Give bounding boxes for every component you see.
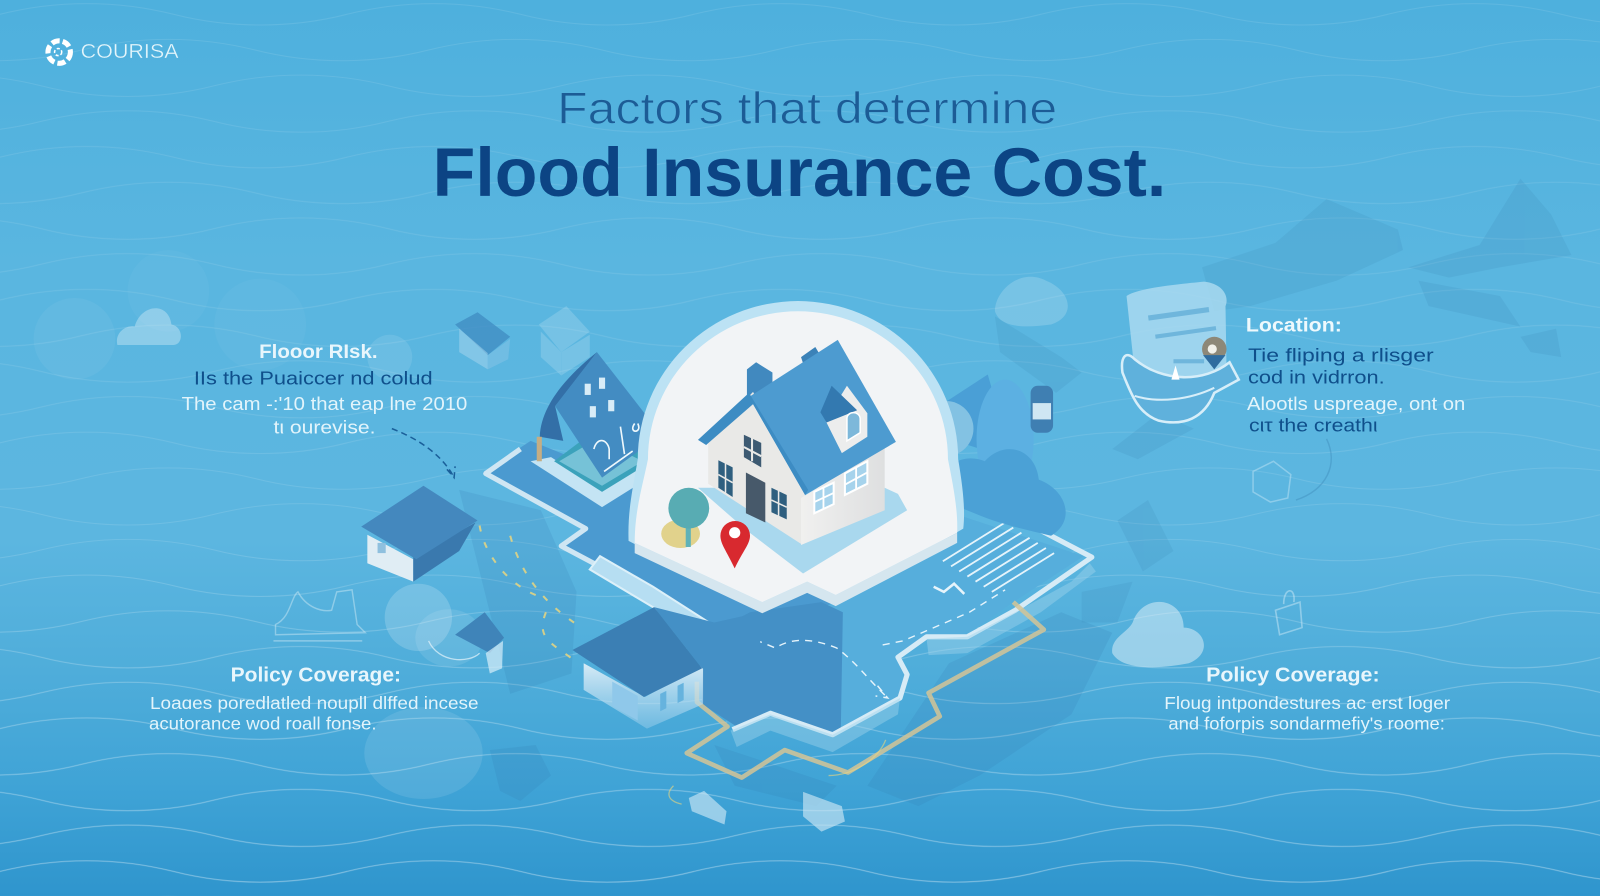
dormer [820,386,867,453]
location line two: cod in vidrron. [1248,367,1385,388]
lower house [572,607,760,729]
door [746,472,765,522]
left policy line two: acutorance wod roall fonse. [149,714,377,734]
location pin [720,521,750,568]
platform edge shadow [635,533,957,613]
white dashed routes [743,590,1005,698]
right policy line one: Floug intpondestures ac erst loger [1164,693,1450,713]
heading: location: Location: [1246,315,1342,337]
field frame outer [733,490,1092,735]
back ridge [801,347,824,372]
right wall window two [845,461,867,495]
road base [483,441,839,635]
floor risk line one: IIs the Puaiccer nd colud [194,368,433,389]
faded map silhouettes top right [995,179,1571,622]
heading: policy coverage right: Policy Coverage: [1206,665,1380,687]
platform and bubble outer ring [628,301,964,610]
floor risk line three: tι ourevise. [273,417,376,438]
faded clouds and blobs [34,250,1204,799]
tan levee path [687,602,1044,778]
platform and bubble inner white [635,311,957,602]
right cloud trees [918,375,1066,536]
tree [668,488,709,547]
title [433,83,1166,211]
flood field [694,510,1084,735]
faded drawing lower left [273,590,365,641]
document with location pin icon [1122,282,1239,422]
heading: floor risk: Flooor RIsk. [259,341,378,363]
attic window [744,435,761,467]
faded icon: lock right [1276,591,1302,635]
title line one: Factors that determine [557,83,1057,134]
location line three: Alootls uspreage, ont on [1247,393,1465,414]
window beside door [771,488,787,519]
faded icon: box right [1253,439,1331,502]
left small house [361,486,478,582]
right wall [801,447,885,545]
text block: policy coverage left [149,665,479,734]
text block: floor risk [182,341,467,438]
location line four: cιτ the creathι [1249,415,1378,436]
heading: policy coverage left: Policy Coverage: [231,665,401,687]
logo wordmark: COURISA [81,41,179,63]
floor risk line two: The cam -:'10 that eap lne 2010 [182,393,467,414]
small house lower left [429,612,504,674]
location line one: Tie fliping a rlisger [1248,344,1434,365]
roof [749,340,896,495]
roof eave [698,393,808,495]
ground mat [698,488,907,574]
sand patch [661,519,700,548]
bottom sketch detail [669,740,886,804]
text block: location [1246,315,1465,436]
upper left house on platform [531,352,665,507]
text block: policy coverage right [1164,665,1450,734]
chimney [747,362,772,400]
field frame shadow band [731,563,1096,752]
right wall window one [814,483,834,513]
crosswalk [943,522,1054,592]
faded dark flood shapes [459,490,1112,806]
dashed arrow to left house [392,429,455,478]
left policy line one: Loaɑes poredlatled noupll dlffed incese [150,693,479,713]
right policy line two: and foforpis sondarmefiy's roome: [1168,714,1445,734]
front gable wall [708,392,805,544]
left window [718,460,733,497]
faded small house top [455,312,510,369]
road frame [486,449,718,630]
water canal [590,556,712,635]
dark field shadow [702,602,843,735]
road mark [934,584,964,594]
small boxes bottom [689,791,845,832]
logo [48,41,179,63]
faded small house centre [539,306,590,376]
main house [698,340,896,545]
title line two: Flood Insurance Cost. [433,135,1166,211]
logo mark [48,41,70,63]
yellow dashed flood paths [480,526,582,658]
